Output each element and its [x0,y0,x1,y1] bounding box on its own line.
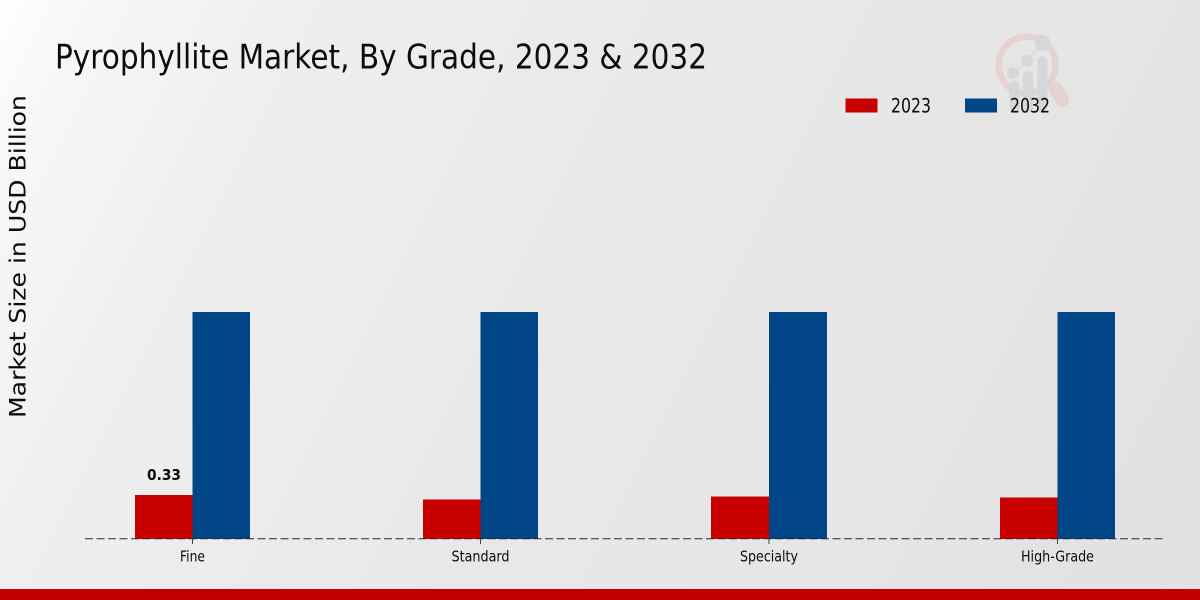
y axis label: Market Size in USD Billion [6,95,32,418]
group: Fine [135,312,250,566]
legend item: 2023 [846,94,931,118]
group: Fine: 0.33 [147,466,181,484]
bar chart [135,312,1115,566]
group: High-Grade: High-Grade [1021,548,1094,566]
legend [846,94,1050,118]
footer bar [0,589,1200,600]
group: Fine: Fine [180,548,205,566]
legend item: 2032: 2032 [1010,94,1050,118]
legend item: 2023: 2023 [891,94,931,118]
group: High-Grade [1000,312,1115,566]
group: Specialty: Specialty [740,548,798,566]
group: Specialty [711,312,827,566]
group: Standard [423,312,538,566]
legend item: 2032 [965,94,1050,118]
icon: watermark logo [998,35,1062,113]
group: Standard: Standard [452,548,510,566]
title: Pyrophyllite Market, By Grade, 2023 & 2032 [55,38,707,78]
